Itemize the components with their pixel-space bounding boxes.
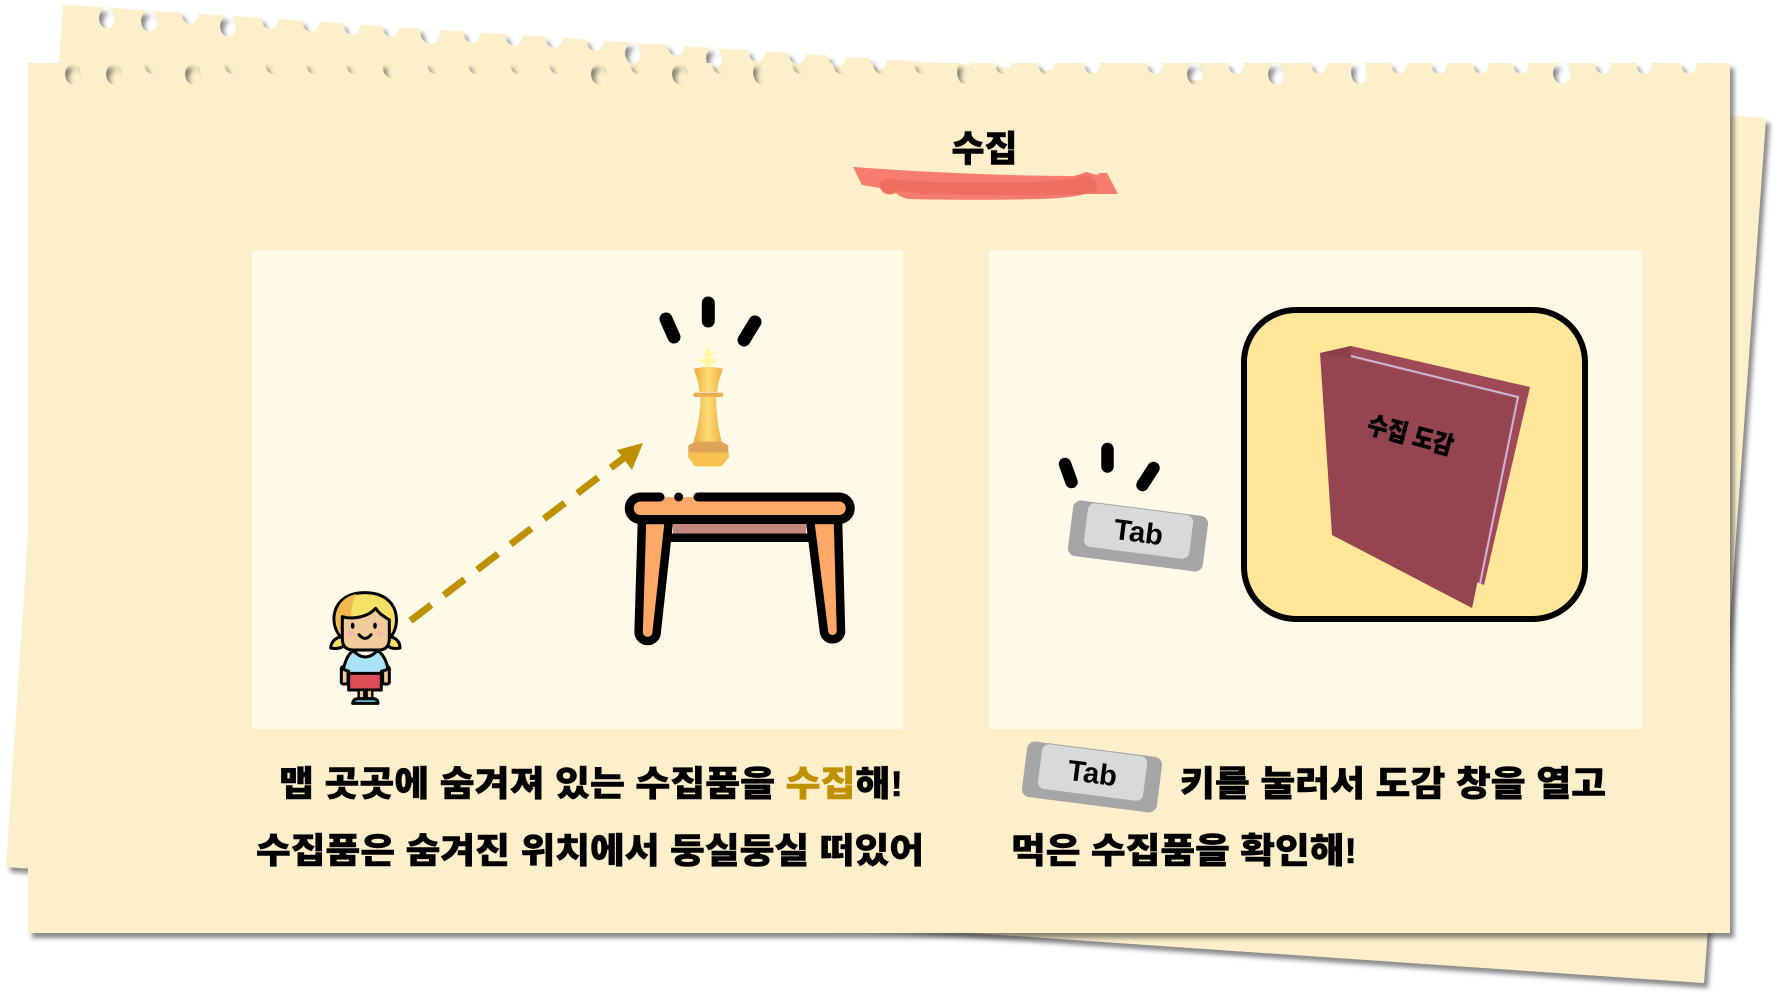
icon: table	[629, 492, 850, 641]
chess crown	[694, 367, 723, 392]
frame: collection book background	[1244, 310, 1585, 619]
icon: collection book	[1320, 346, 1530, 608]
key cap	[1083, 502, 1194, 560]
icon: girl hair	[334, 593, 396, 638]
table crossbar	[673, 524, 806, 534]
panel: left illustration	[252, 250, 903, 729]
inline key cap	[1037, 743, 1148, 802]
title: 수집	[952, 128, 1018, 169]
icon: girl pigtails	[331, 636, 400, 648]
icon: Tab key in panel	[1067, 500, 1209, 572]
chess collar	[693, 393, 723, 397]
icon: sparkle marks above chess piece	[666, 303, 755, 340]
icon: girl skirt	[349, 673, 381, 690]
key label: Tab	[1112, 514, 1165, 552]
inline key label: Tab	[1066, 755, 1119, 793]
icon: girl hair shade	[336, 594, 357, 633]
table top outline	[629, 497, 850, 520]
icon: girl shoes	[353, 699, 378, 703]
text: right description line 1: 키를 눌러서 도감 창을 열고	[1180, 765, 1606, 804]
dashed arrow from girl to chess piece	[410, 443, 643, 621]
title highlight brush stroke	[853, 167, 1118, 200]
table outline dot	[674, 492, 683, 502]
icon: sparkle marks above Tab key	[1065, 449, 1154, 485]
book front cover	[1320, 353, 1516, 608]
chess base	[688, 442, 728, 453]
panel: right illustration	[989, 250, 1642, 729]
chess cross	[701, 347, 716, 367]
icon: girl legs	[359, 690, 372, 699]
inline key base	[1021, 741, 1163, 813]
icon: girl mouth	[359, 635, 371, 638]
icon: girl character	[331, 593, 400, 703]
key base	[1067, 500, 1209, 572]
icon: girl eyes	[351, 622, 377, 629]
icon: golden chess king	[688, 347, 729, 466]
icon: girl cheeks	[347, 631, 383, 636]
table left leg	[639, 520, 669, 641]
book title: 수집 도감	[1364, 411, 1456, 461]
icon: inline Tab key	[1021, 741, 1163, 813]
text: right description line 2: 먹은 수집품을 확인해!	[1011, 832, 1357, 871]
chess foot	[688, 452, 729, 466]
book spine inner shadow	[1320, 346, 1351, 358]
text: left description line 1: 맵 곳곳에 숨겨져 있는 수집품을 수집해!	[279, 765, 903, 804]
table top surface	[630, 497, 850, 520]
book back cover and spine	[1320, 346, 1530, 608]
icon: girl shirt	[343, 651, 388, 674]
icon: girl face	[342, 608, 389, 650]
book pages	[1351, 356, 1518, 584]
chess body	[693, 397, 722, 443]
text: left description line 2: 수집품은 숨겨진 위치에서 둥실둥실 떠있어	[256, 832, 924, 871]
table right leg	[810, 520, 841, 639]
icon: girl arms	[341, 667, 389, 684]
